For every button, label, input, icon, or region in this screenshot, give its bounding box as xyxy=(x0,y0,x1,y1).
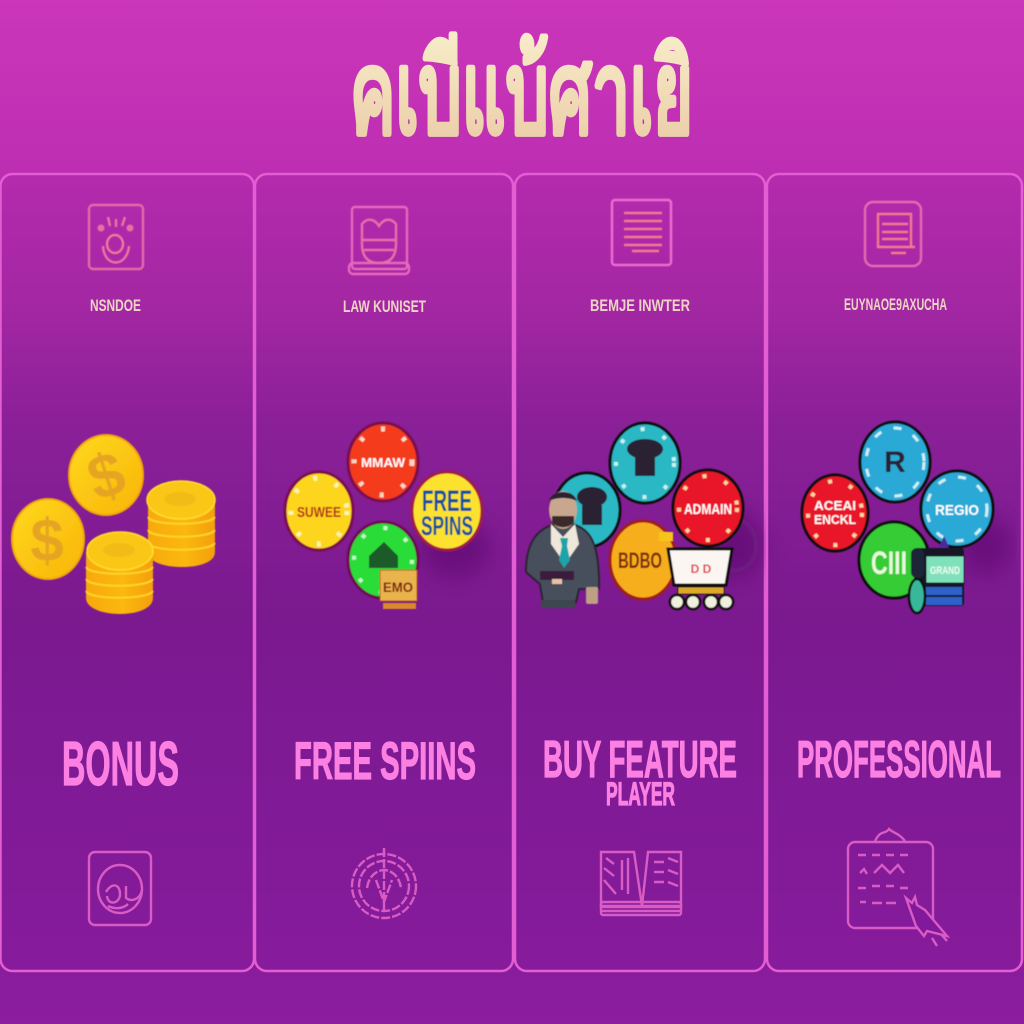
chip free spins: FREE xyxy=(422,485,472,518)
heading: bonus: BONUS xyxy=(62,730,179,799)
chip red xyxy=(348,423,418,501)
title: คเบีแบ้ศาเยิ xyxy=(350,28,693,158)
chip blue top: R xyxy=(884,446,906,479)
panel: buy feature xyxy=(515,174,765,971)
chip teal left xyxy=(554,473,620,547)
chip blue top xyxy=(860,422,930,502)
chip free spins xyxy=(412,472,482,550)
coin stack right xyxy=(147,481,215,567)
slot sign xyxy=(380,570,417,609)
slot sign: EMO xyxy=(383,579,413,595)
panel: free spins xyxy=(255,174,513,971)
icon: top professional xyxy=(865,202,921,266)
label: top free spins: LAW KUNISET xyxy=(343,297,426,316)
coin left xyxy=(12,499,84,579)
icon: top bonus xyxy=(89,205,143,269)
chip red xyxy=(802,475,868,551)
chip shadow xyxy=(707,511,763,579)
illustration: chips and slot machine xyxy=(802,422,1013,613)
slot machine: GRAND xyxy=(930,565,960,577)
chip yellow: SUWEE xyxy=(297,504,341,521)
subheading: player: PLAYER xyxy=(606,776,675,812)
chip shadow xyxy=(419,518,491,578)
illustration: chips, player and cart xyxy=(526,423,763,609)
chip red: ACEAI xyxy=(814,498,856,513)
chip red: MMAW xyxy=(361,455,406,470)
panel: bonus xyxy=(0,174,254,971)
chip teal top xyxy=(610,423,680,503)
shopping cart: D D xyxy=(691,562,712,576)
chip red: ADMAIN xyxy=(684,501,732,518)
chip yellow xyxy=(285,472,353,550)
coin top xyxy=(69,435,143,515)
icon: bottom buy feature xyxy=(601,852,681,915)
chip green xyxy=(859,522,929,598)
icon: bottom bonus xyxy=(89,852,151,925)
panel: professional xyxy=(767,174,1022,971)
chip shadow xyxy=(957,515,1013,575)
chip green xyxy=(348,522,418,598)
chip blue right xyxy=(921,471,993,547)
chip red: ENCKL xyxy=(814,512,856,527)
chip orange xyxy=(610,521,676,599)
coin stack front xyxy=(86,532,153,614)
heading: free spins: FREE SPIINS xyxy=(294,732,476,791)
icon: bottom professional xyxy=(848,829,947,946)
label: top bonus: NSNDOE xyxy=(90,296,141,315)
chip free spins: SPINS xyxy=(421,511,473,541)
coin left: $ xyxy=(30,507,64,574)
chip green: CIII xyxy=(871,545,907,581)
slot machine xyxy=(909,536,964,613)
label: top professional: EUYNAOE9AXUCHA xyxy=(844,295,947,314)
coin top: $ xyxy=(79,438,134,515)
chip blue right: REGIO xyxy=(935,502,979,519)
label: top buy feature: BEMJE INWTER xyxy=(590,296,690,315)
icon: bottom free spins xyxy=(352,848,416,918)
illustration: chips xyxy=(285,423,491,609)
shopping cart xyxy=(659,532,733,609)
illustration: gold coins xyxy=(12,435,215,614)
icon: top free spins xyxy=(349,207,409,274)
chip orange: BDBO xyxy=(618,548,662,573)
heading: buy feature: BUY FEATURE xyxy=(543,731,737,789)
chip red xyxy=(673,470,743,546)
icon: top buy feature xyxy=(612,200,671,265)
person xyxy=(526,491,599,608)
